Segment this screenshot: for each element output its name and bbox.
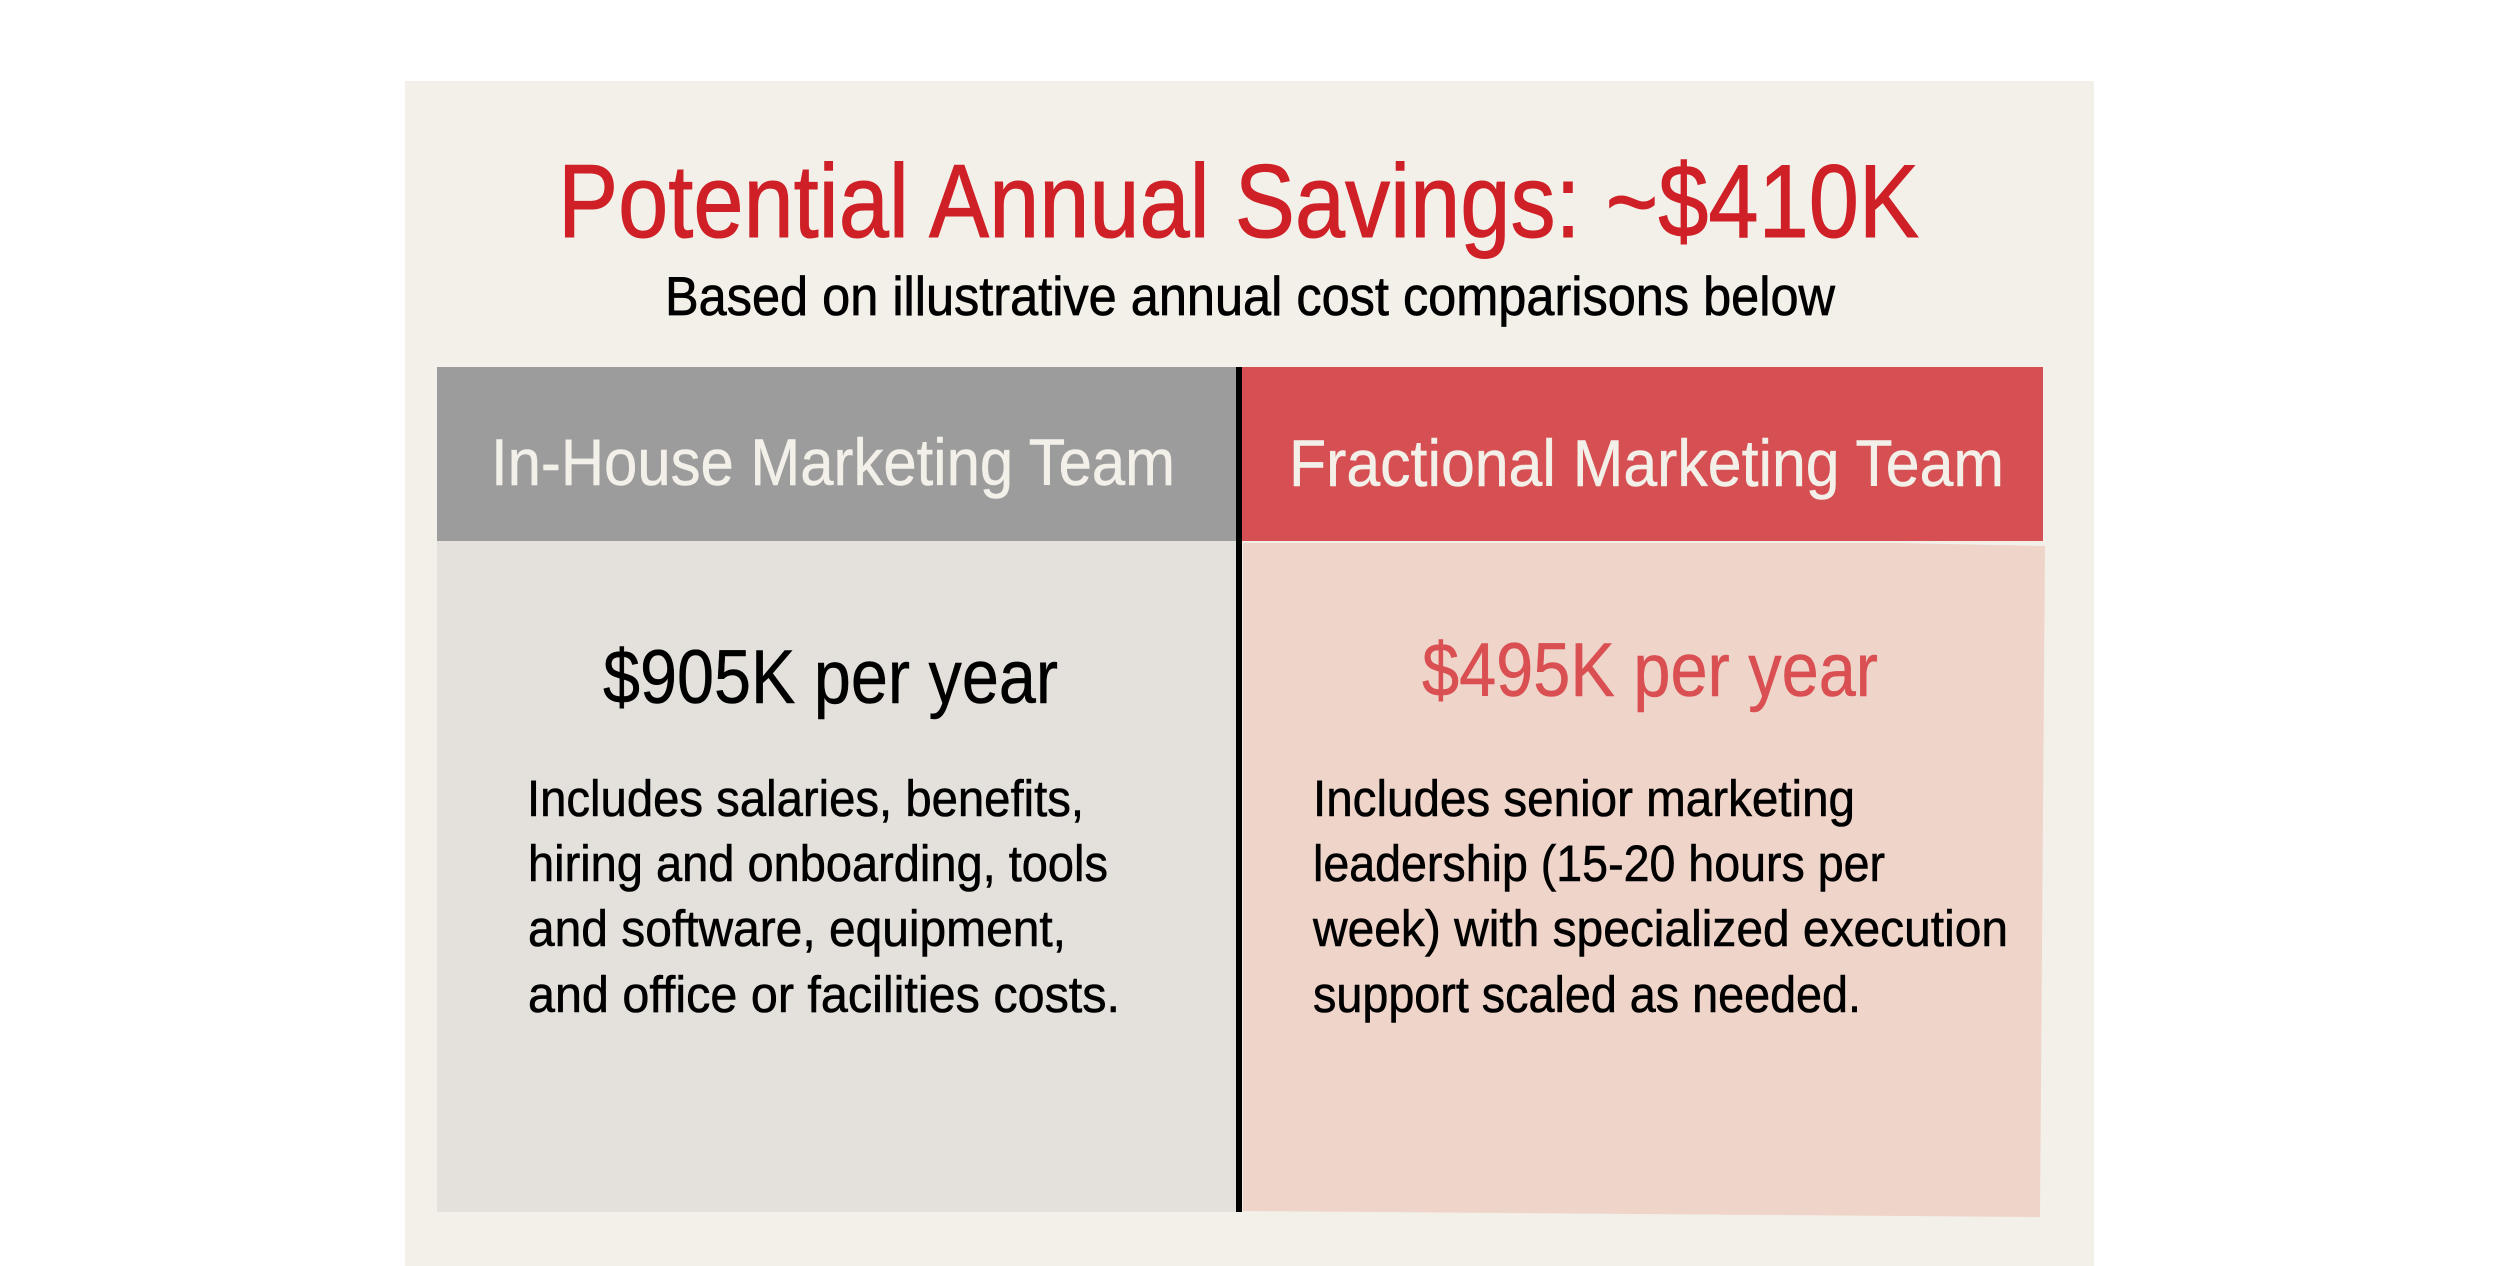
fractional header text: Fractional Marketing Team <box>1289 426 2004 500</box>
in-house description: Includes salaries, benefits, <box>527 770 1084 827</box>
fractional body panel <box>1243 543 2045 1217</box>
in-house header bar <box>437 367 1237 541</box>
fractional description <box>1312 770 2008 1023</box>
fractional description: Includes senior marketing <box>1313 770 1855 827</box>
title: Potential Annual Savings: ~$410K <box>558 144 1919 260</box>
center divider <box>1236 367 1242 1212</box>
fractional header bar <box>1242 367 2043 541</box>
in-house description: and office or facilities costs. <box>528 966 1120 1023</box>
fractional annual cost: $495K per year <box>1422 628 1878 713</box>
in-house description: and software, equipment, <box>528 900 1066 957</box>
panel: in-house marketing team <box>437 367 1237 1212</box>
in-house description: hiring and onboarding, tools <box>528 835 1108 892</box>
background panel <box>405 81 2094 1266</box>
in-house annual cost: $905K per year <box>603 635 1058 720</box>
in-house header text: In-House Marketing Team <box>491 425 1175 499</box>
panel: fractional marketing team <box>1242 367 2045 1217</box>
fractional description: support scaled as needed. <box>1313 966 1861 1023</box>
in-house body panel <box>437 541 1237 1212</box>
in-house description <box>527 770 1120 1023</box>
subtitle: Based on illustrative annual cost comparisons below <box>665 265 1835 327</box>
fractional description: leadership (15-20 hours per <box>1313 835 1885 892</box>
fractional description: week) with specialized execution <box>1312 900 2008 957</box>
